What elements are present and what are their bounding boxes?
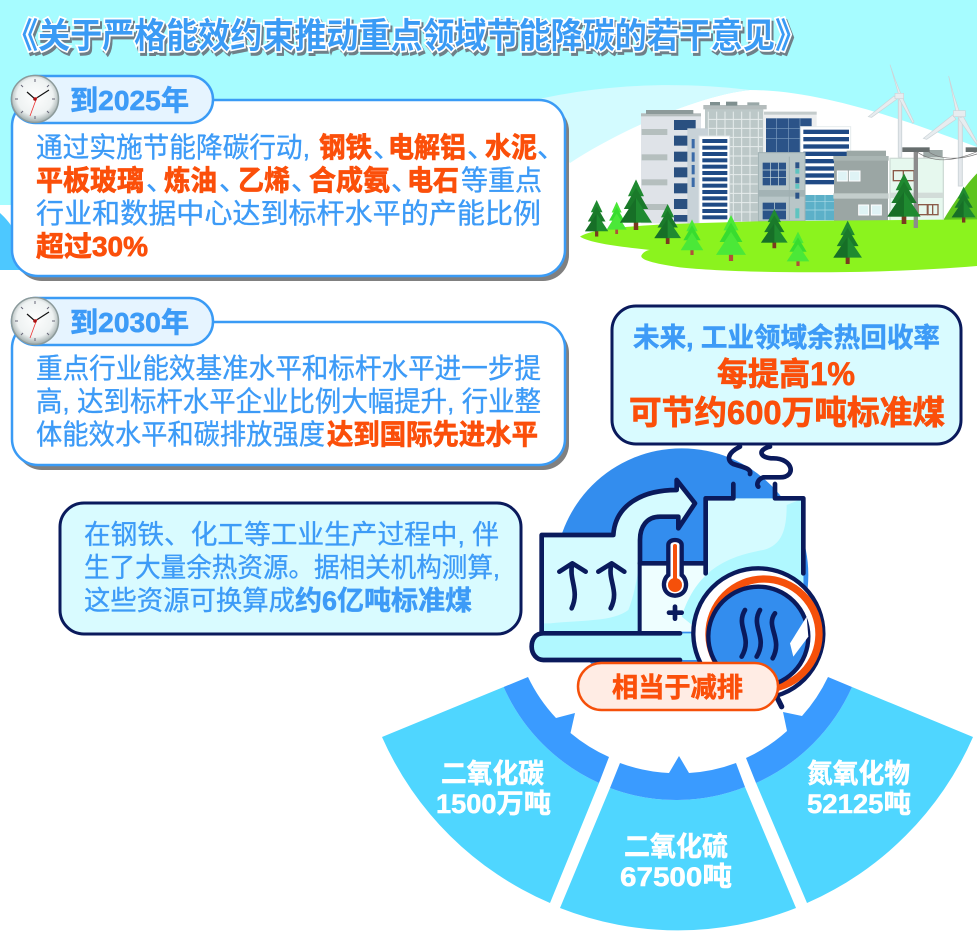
ground xyxy=(580,219,977,272)
wedge: nitrogen oxides: 52125吨 xyxy=(807,789,911,819)
thermometer xyxy=(664,540,686,596)
callout: waste heat resources xyxy=(60,503,521,634)
label pill: equivalent reduction xyxy=(578,663,778,710)
callout: waste heat resources: 约6亿吨标准煤 xyxy=(295,586,472,616)
text: 2025 goals body: 、 xyxy=(467,132,495,163)
sky background xyxy=(0,0,977,205)
text: 2030 goals body: 高, 达到标杆水平企业比例大幅提升, 行业整 xyxy=(36,386,541,417)
text: 2030 goals body: 达到国际先进水平 xyxy=(327,419,538,450)
wedge: carbon dioxide xyxy=(382,677,609,903)
text: 2025 goals body: 、 xyxy=(146,165,174,196)
text: 2025 goals body: 钢铁 xyxy=(319,132,372,163)
text: 2025 goals body xyxy=(36,132,565,262)
smoke xyxy=(729,447,791,487)
base xyxy=(532,633,697,660)
heading pill: 到2030年 xyxy=(12,298,213,345)
callout: waste heat resources: 生了大量余热资源。据相关机构测算, xyxy=(84,553,500,583)
text: 2030 goals body: 体能效水平和碳排放强度 xyxy=(36,419,325,450)
callout: waste heat resources: 在钢铁、化工等工业生产过程中, 伴 xyxy=(84,520,499,550)
text: 2025 goals body: 水泥 xyxy=(485,132,537,163)
text: 2025 goals body: 电解铝 xyxy=(388,132,466,163)
wedge: sulfur dioxide: 67500吨 xyxy=(620,862,732,892)
wedge: carbon dioxide: 二氧化碳 xyxy=(441,759,544,789)
middle chamber xyxy=(642,563,705,632)
callout: waste heat resources: 这些资源可换算成 xyxy=(84,586,295,616)
wedge: nitrogen oxides xyxy=(746,677,973,903)
right tank xyxy=(705,498,803,597)
text: 2025 goals body: 乙烯 xyxy=(238,165,290,196)
text: 2025 goals body: 、 xyxy=(291,165,319,196)
panel: 2025 goals xyxy=(12,76,569,281)
text: 2025 goals body: 、 xyxy=(391,165,419,196)
text: 2025 goals body: 电石 xyxy=(407,165,459,196)
text: 2030 goals body: 重点行业能效基准水平和标杆水平进一步提 xyxy=(36,353,541,384)
magnifier xyxy=(693,568,823,698)
left chamber and duct xyxy=(542,480,695,632)
rising heat arrows xyxy=(559,563,624,608)
wedge: nitrogen oxides: 氮氧化物 xyxy=(807,759,910,789)
text: 2025 goals body: 超过30% xyxy=(36,231,148,262)
illustration: city, trees and wind turbines xyxy=(580,65,977,272)
callout: future savings: 可节约600万吨标准煤 xyxy=(629,394,945,431)
text: 2025 goals body: 合成氨 xyxy=(309,165,390,196)
wedge: carbon dioxide: 1500万吨 xyxy=(436,789,551,819)
left blue wave xyxy=(0,213,30,270)
wedge: sulfur dioxide xyxy=(560,756,796,930)
heading pill: 到2025年 xyxy=(12,76,213,123)
text: 2025 goals body: 、 xyxy=(537,132,565,163)
text: 2025 goals body: 、 xyxy=(373,132,401,163)
heading pill: 到2030年: 到2030年 xyxy=(70,307,189,338)
icon: clock xyxy=(12,298,58,344)
label pill: equivalent reduction: 相当于减排 xyxy=(612,673,743,703)
text: 2025 goals body: 通过实施节能降碳行动, xyxy=(36,132,310,163)
heading pill: 到2025年: 到2025年 xyxy=(70,85,189,116)
wedge: sulfur dioxide: 二氧化硫 xyxy=(624,832,728,862)
callout: future savings: 每提高1% xyxy=(717,356,855,392)
icon: waste heat recovery machine xyxy=(532,447,823,707)
text: 2025 goals body: 、 xyxy=(219,165,247,196)
callout: future savings: 未来, 工业领域余热回收率 xyxy=(633,323,940,353)
text: 2025 goals body: 平板玻璃 xyxy=(36,165,144,196)
text: 2030 goals body xyxy=(36,353,541,450)
text: 2025 goals body: 等重点 xyxy=(461,165,542,196)
pale hill band xyxy=(510,85,750,163)
text: 2025 goals body: 炼油 xyxy=(164,165,217,196)
title: 《关于严格能效约束推动重点领域节能降碳的若干意见》 xyxy=(6,17,807,56)
callout: future savings xyxy=(612,306,961,444)
icon: clock xyxy=(12,76,58,122)
panel: 2030 goals xyxy=(12,298,569,470)
text: 2025 goals body: 行业和数据中心达到标杆水平的产能比例 xyxy=(36,198,541,229)
